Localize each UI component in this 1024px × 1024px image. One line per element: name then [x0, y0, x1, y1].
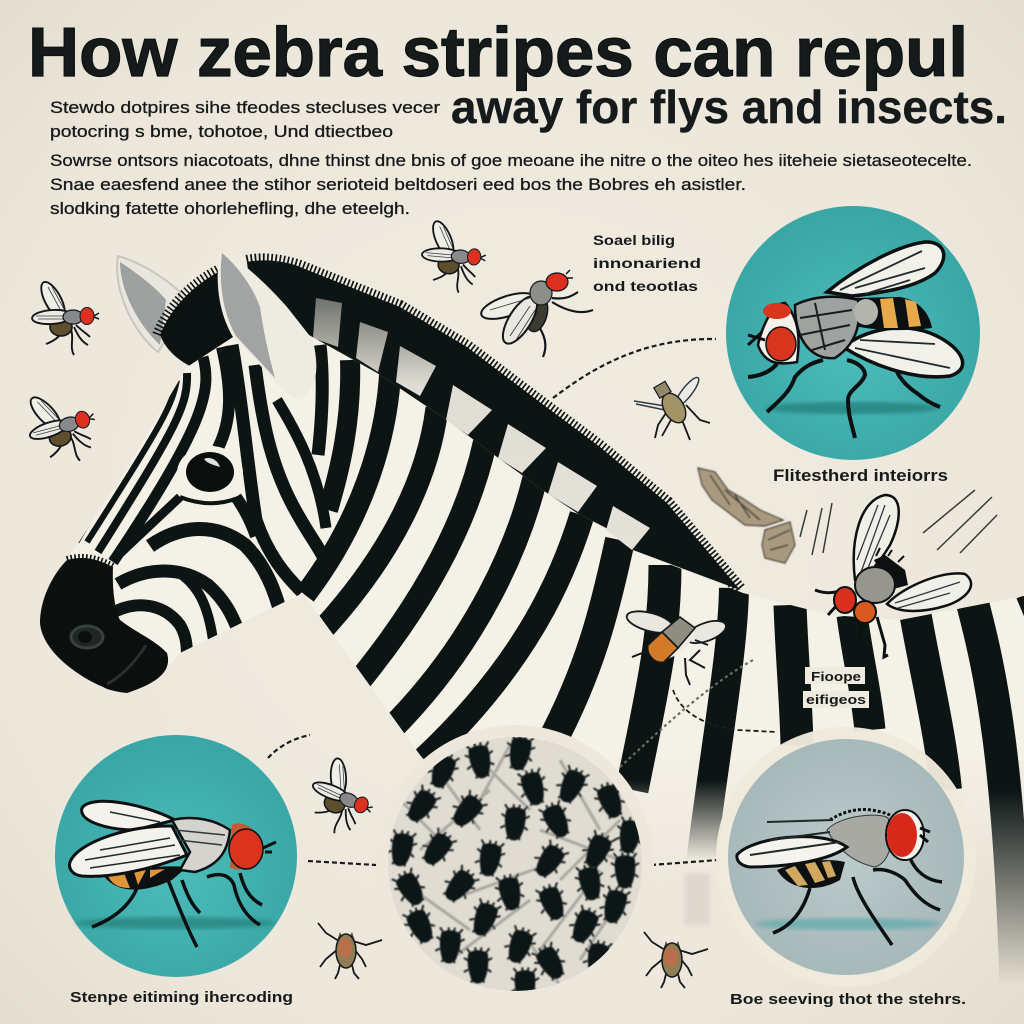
zebra mane: [247, 260, 740, 590]
intro text block: Sowrse ontsors niacotoats, dhne thinst dne bnis of goe meoane ihe nitre o the oiteo hes iiteheie sietaseotecelte.: [50, 151, 972, 170]
intro text block: [50, 98, 972, 218]
fly abdomen: [850, 297, 932, 330]
zebra head, neck and body base: [40, 330, 1024, 960]
label: on-stripe tag: Fioope: [811, 669, 861, 684]
swarm texture: [400, 745, 620, 985]
fly wing: [737, 837, 847, 867]
brown fly bottom 2: [644, 932, 708, 988]
zebra muzzle: [40, 558, 168, 693]
fly on stripes: [624, 607, 729, 685]
zebra eye: [177, 446, 243, 503]
panel: bottom left fly circle: [55, 735, 297, 977]
fly thorax: [795, 297, 859, 358]
label: circle caption top: Flitestherd inteiorrs: [773, 466, 948, 485]
zebra forelock: [158, 270, 240, 366]
zebra far ear: [117, 256, 180, 352]
fly abdomen: [103, 866, 187, 890]
fly wings: [827, 242, 944, 296]
small flies: [19, 217, 729, 988]
fly thorax: [827, 815, 891, 867]
ground shadow: [75, 917, 275, 929]
label: top note: ond teootlas: [593, 278, 698, 294]
fly legs: [92, 873, 262, 947]
intro text block: Snae eaesfend anee the stihor serioteid beltdoseri eed bos the Bobres eh asistler.: [50, 175, 746, 194]
fly abdomen: [777, 860, 845, 888]
intro text block: potocring s bme, tohotoe, Und dtiectbeo: [50, 122, 393, 141]
label: top note: Soael bilig: [593, 232, 675, 248]
label: on-stripe tag: [803, 667, 869, 708]
ground shadow: [755, 918, 941, 930]
fly eye: [886, 810, 924, 860]
hovering fly: [815, 495, 971, 657]
panel: mottled fly swarm circle: [376, 725, 654, 1003]
fly top left 2: [19, 380, 104, 472]
swarm flies: [385, 732, 647, 1003]
zebra body stripes: [305, 360, 1024, 990]
fly thorax: [172, 818, 230, 872]
zebra illustration: [40, 250, 1024, 990]
zebra face: [40, 345, 326, 693]
zebra near ear: [218, 250, 316, 400]
fly wings: [82, 801, 175, 830]
label: top note: [593, 232, 701, 294]
ground shadow: [766, 402, 940, 414]
fly legs: [748, 360, 940, 438]
fly debris: [698, 468, 795, 563]
motion lines: [800, 490, 997, 555]
fly top centre: [418, 217, 489, 295]
tan fly near mane: [634, 375, 710, 440]
dashed flight paths: [268, 339, 777, 865]
label: on-stripe tag: eifigeos: [806, 692, 866, 707]
label: bottom left caption: Stenpe eitiming ihercoding: [70, 989, 293, 1006]
panel: bottom right grey fly circle: [716, 727, 976, 987]
fly top left 1: [32, 279, 99, 355]
fly head: [758, 303, 799, 363]
title: [28, 13, 1007, 133]
brown fly bottom 1: [318, 923, 382, 979]
title: How zebra stripes can repul: [28, 13, 968, 91]
label: top note: innonariend: [593, 255, 701, 271]
label: bottom right caption: Boe seeving thot the stehrs.: [730, 991, 966, 1008]
panel: top right fly circle: [726, 206, 980, 460]
fly legs: [773, 858, 942, 945]
intro text block: Stewdo dotpires sihe tfeodes stecluses vecer: [50, 98, 440, 117]
fly bottom centre: [298, 750, 387, 843]
faint stripe trace: [684, 873, 710, 925]
title: away for flys and insects.: [451, 81, 1007, 133]
fly mid centre: [478, 270, 593, 357]
intro text block: slodking fatette ohorlehefling, dhe eteelgh.: [50, 199, 410, 218]
zebra face stripes: [70, 345, 326, 656]
fly eye: [230, 823, 262, 870]
